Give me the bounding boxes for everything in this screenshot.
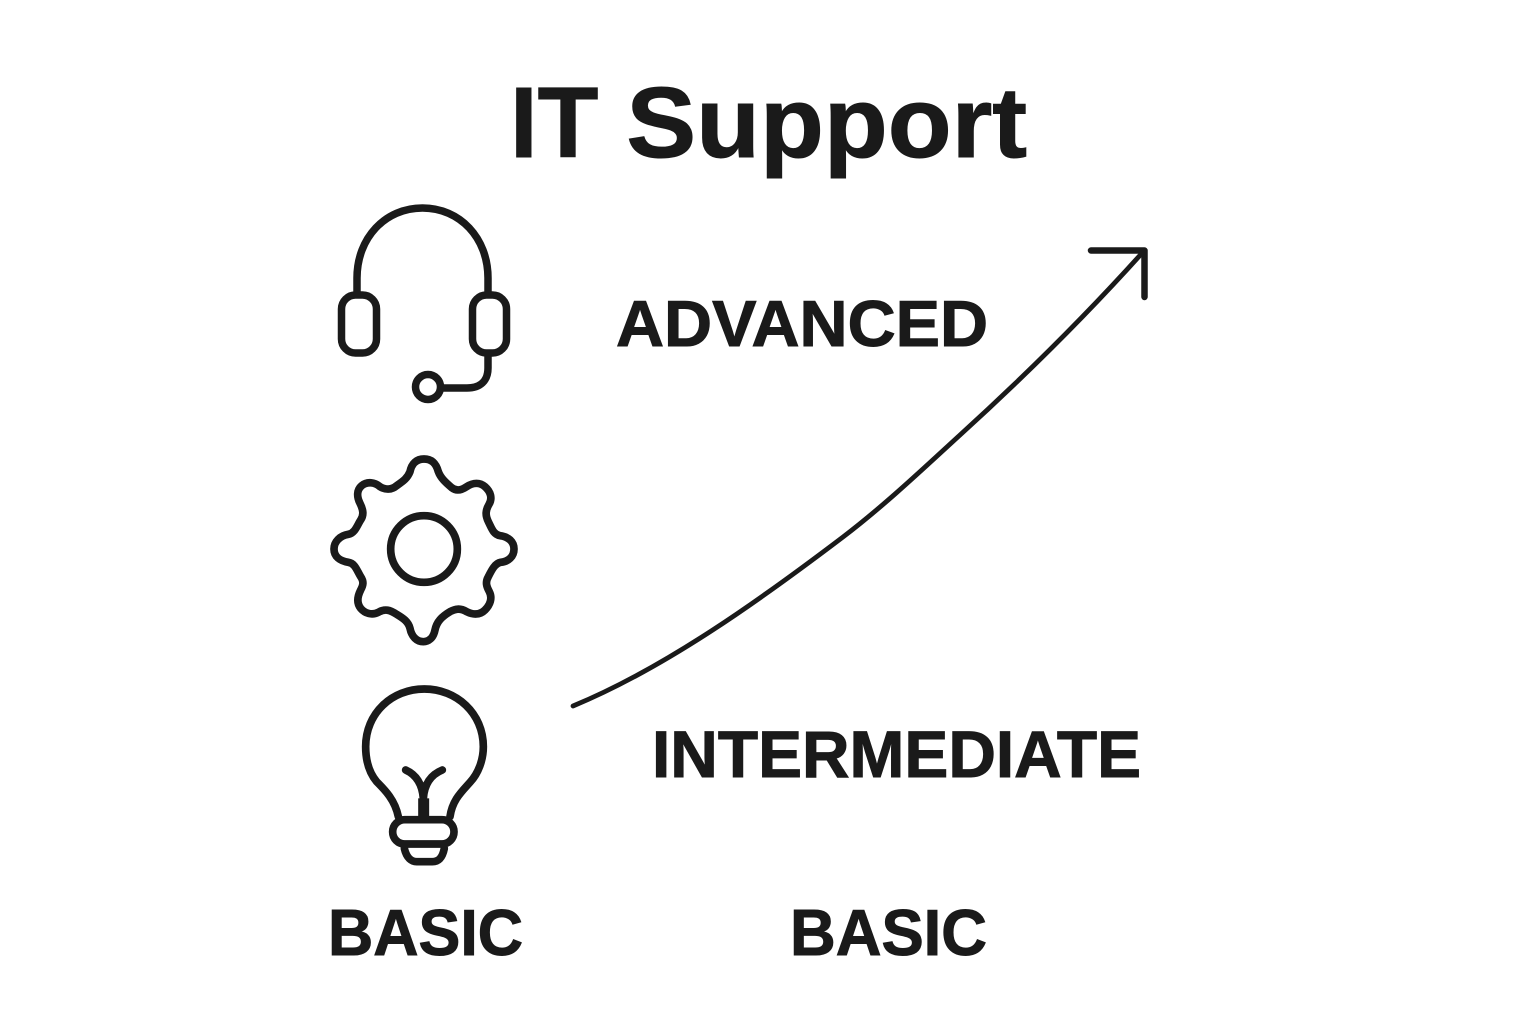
- title: Support: [626, 67, 1027, 179]
- label: basic (right): BASIC: [790, 896, 987, 969]
- icon: light bulb: [366, 689, 483, 862]
- label: advanced: ADVANCED: [616, 287, 988, 360]
- label: intermediate: INTERMEDIATE: [652, 717, 1141, 791]
- icon: gear: [334, 459, 514, 642]
- title: IT: [510, 67, 598, 179]
- icon: headset: [342, 208, 506, 400]
- label: basic (left): BASIC: [328, 896, 523, 969]
- arrow: rising curve: [573, 250, 1144, 706]
